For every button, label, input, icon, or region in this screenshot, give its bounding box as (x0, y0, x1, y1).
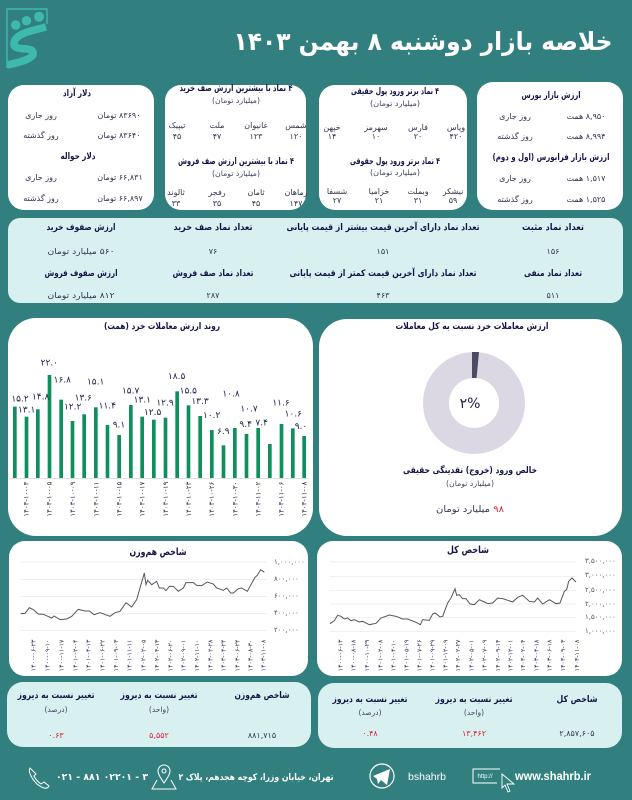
change percent column: تغییر نسبت به دیروز (332, 695, 408, 705)
axis labels: equal weight (274, 558, 305, 634)
real money list: سهرمز (363, 123, 388, 132)
statistics row 2: ۵۱۱ (547, 291, 559, 300)
bar chart: ۶.۹ (217, 427, 230, 437)
line chart: equal weight index: ۱۴۰۲-۰۲-۰۵ (141, 639, 148, 671)
bar chart: ۹.۴ (239, 420, 252, 430)
axis labels: total index: ۳,۵۰۰,۰۰۰ (585, 557, 616, 565)
legal money list: ۳۱ (414, 196, 422, 205)
statistics row 2: تعداد نماد صف فروش (172, 269, 254, 279)
bar chart: ۱۱.۴ (99, 402, 116, 412)
bar chart: ۱۴۰۳-۱۱-۰۸ (301, 481, 309, 517)
donut chart: ۲% (460, 396, 480, 412)
bar chart: ۱۳.۳ (191, 397, 209, 407)
heading: buy queue: ۴ نماد با بیشترین ارزش صف خرید (180, 84, 293, 94)
axis labels: total index: ۲,۰۰۰,۰۰۰ (585, 600, 616, 608)
line chart: total index: ۱۴۰۱-۰۵-۱۹ (403, 639, 410, 671)
change units column (435, 695, 512, 738)
address: تهران، خیابان وزرا، کوچه هجدهم، پلاک ۲ (178, 773, 334, 783)
icon: telegram (370, 764, 394, 788)
line chart: equal weight index: ۱۴۰۳-۰۶-۲۴ (235, 640, 242, 671)
buy queue list: ۴۵ (173, 132, 181, 141)
bar chart: ۲۲.۰ (41, 359, 58, 369)
panel: retail share (319, 319, 622, 536)
buy queue list: ۴۷ (213, 132, 222, 141)
line chart: equal weight index: ۱۴۰۳-۱۱-۰۸ (261, 639, 268, 671)
sell queue list: ۳۵ (213, 199, 221, 208)
legal money list: ۲۷ (333, 196, 342, 205)
statistics row 1: ۷۶ (209, 247, 217, 256)
statistics row 1: تعداد نماد دارای آخرین قیمت بیشتر از قیمت پایانی (286, 221, 480, 233)
sell queue list: ۳۳ (172, 199, 181, 208)
legal money list: ۲۱ (375, 196, 383, 205)
legal money list: ۵۹ (449, 196, 457, 205)
heading: stock market value: ارزش بازار بورس (522, 91, 580, 101)
bar chart: ۱۰.۸ (222, 389, 240, 399)
bar chart: ۱۴۰۳-۱۰-۱۵ (115, 481, 123, 517)
panel: total index summary (318, 683, 622, 748)
bar chart: ۱۴۰۳-۱۱-۰۶ (277, 481, 285, 517)
line chart: equal weight index: ۱۴۰۰-۰۹-۱۰ (45, 640, 52, 671)
axis labels: total index: ۳,۰۰۰,۰۰۰ (585, 571, 616, 579)
change percent column: ۰.۶۳ (48, 731, 64, 740)
legal money list: شسفا (327, 187, 347, 196)
sell queue list: ۱۴۷ (290, 199, 303, 208)
line chart: equal weight index: ۱۴۰۲-۰۹-۰۱ (181, 640, 188, 671)
axis labels: total index: ۱,۵۰۰,۰۰۰ (585, 613, 616, 621)
bar chart: ۷.۴ (255, 419, 268, 429)
footer contact bar (29, 764, 592, 792)
statistics row 2: ۲۸۷ (207, 291, 220, 300)
sell queue list (167, 188, 308, 208)
subheading: (میلیارد تومان) (212, 169, 260, 178)
line chart: equal weight index: ۱۴۰۱-۰۴-۱۳ (86, 639, 93, 671)
bar chart: ۱۰.۷ (240, 404, 258, 414)
change percent column: تغییر نسبت به دیروز (17, 691, 94, 701)
total index value column: شاخص کل (556, 695, 598, 705)
line chart: equal weight index: ۱۴۰۱-۰۶-۲۲ (100, 639, 107, 671)
line chart: total index: ۱۴۰۲-۰۷-۰۹ (482, 639, 489, 671)
heading: equal weight index: شاخص هم‌وزن (130, 547, 187, 558)
change units column (120, 691, 198, 740)
line chart: equal weight index: ۱۴۰۰-۰۶-۲۳ (31, 639, 38, 671)
line chart: total index: ۱۴۰۱-۰۲-۰۸ (377, 639, 384, 671)
real money list: خپهن (323, 123, 341, 132)
panel: market value (477, 82, 623, 210)
real money list: ۱۰ (372, 132, 380, 141)
buy queue list (169, 121, 307, 141)
statistics row 1 (46, 221, 584, 256)
change units column: (واحد) (464, 708, 484, 717)
axis labels: equal weight: ۱,۰۰۰,۰۰۰ (274, 558, 305, 566)
change units column: تغییر نسبت به دیروز (120, 691, 198, 701)
phone number: ۰۲۱ - ۸۸۱ ۰۲۲۰۱ - ۳ (56, 772, 148, 783)
remittance rows: ۶۶,۸۹۷ تومان (97, 194, 143, 203)
buy queue list: ۱۲۰ (290, 132, 302, 141)
bar chart: ۱۳.۶ (75, 393, 92, 403)
legal money list: وبملت (407, 187, 429, 196)
bar chart: ۱۴۰۳-۱۰-۰۹ (69, 481, 77, 517)
statistics row 2: ۸۱۲ میلیارد تومان (48, 291, 115, 300)
axis labels: total index: ۲,۵۰۰,۰۰۰ (585, 586, 616, 594)
website: www.shahrb.ir (514, 771, 592, 783)
panel: money flow (319, 85, 467, 210)
caption: net real liquidity: خالص ورود (خروج) نقدینگی حقیقی (403, 464, 537, 476)
bar chart: ۱۵.۲ (11, 394, 29, 404)
heading: free dollar: دلار آزاد (63, 87, 91, 99)
net value: ۹۸ میلیارد تومان (436, 505, 504, 515)
icon: location pin (152, 765, 176, 789)
logo (7, 9, 47, 68)
bar chart: ۱۴۰۳-۱۰-۳۰ (231, 482, 239, 517)
sell queue list: ۴۵ (252, 199, 260, 208)
bar chart: ۱۲.۲ (64, 403, 82, 413)
equal weight value column (234, 691, 290, 740)
panel: market statistics (8, 218, 623, 303)
change units column: ۵,۵۵۲ (149, 731, 169, 740)
subheading: (میلیارد تومان) (370, 168, 420, 177)
statistics row 1: ۱۵۱ (377, 247, 389, 256)
heading: real money: ۴ نماد برتر ورود پول حقیقی (351, 87, 439, 97)
line chart: equal weight index: ۱۴۰۰-۱۱-۱۷ (59, 639, 66, 671)
axis labels: equal weight: ۲۰۰,۰۰۰ (274, 626, 299, 634)
bar chart: ۹.۱ (113, 420, 125, 430)
axis labels: equal weight: ۸۰۰,۰۰۰ (274, 575, 299, 583)
farabourse rows: روز گذشته (497, 194, 533, 204)
bar chart: ۱۵.۵ (180, 386, 197, 396)
statistics row 1: ارزش صفوف خرید (46, 223, 116, 233)
dollar rows: روز جاری (25, 111, 57, 120)
line chart: equal weight index: ۱۴۰۳-۰۴-۲۴ (221, 640, 228, 671)
line chart: equal weight index (21, 562, 268, 671)
remittance rows (23, 173, 143, 203)
bar chart: ۱۵.۷ (122, 386, 140, 396)
icon: web address cursor: http:// (477, 774, 493, 780)
change units column: ۱۳,۴۶۲ (462, 729, 486, 738)
real money list: ۴۲۰ (450, 132, 462, 141)
panel: total index chart (317, 541, 622, 676)
bar chart: ۱۴۰۳-۱۰-۰۵ (46, 481, 54, 517)
buy queue list: ۱۲۳ (250, 132, 263, 141)
bar chart: ۱۴۰۳-۱۰-۱۱ (92, 482, 100, 517)
line chart: total index: ۱۴۰۰-۰۸-۱۸ (351, 639, 358, 671)
bar chart: ۱۳.۱ (134, 395, 151, 405)
line chart: equal weight index: ۱۴۰۱-۰۲-۰۴ (72, 640, 79, 671)
axis labels: total index: ۱,۰۰۰,۰۰۰ (585, 627, 616, 635)
legal money list (327, 187, 463, 205)
bar chart: ۱۴۰۳-۱۰-۱۷ (139, 481, 147, 517)
axis labels: total index (585, 557, 616, 635)
line chart: equal weight index: ۱۴۰۲-۰۴-۱۳ (154, 639, 161, 671)
subheading: (میلیارد تومان) (212, 96, 260, 105)
statistics row 1: تعداد نماد صف خرید (174, 223, 252, 233)
bar chart: ۱۴۰۳-۱۱-۰۲ (255, 481, 263, 517)
panel: queues (165, 84, 308, 210)
change percent column (332, 695, 408, 738)
bar chart: ۹.۰ (295, 422, 307, 432)
heading: remittance dollar: دلار حواله (60, 152, 96, 162)
statistics row 1: تعداد نماد مثبت (522, 223, 584, 233)
heading: trend: روند ارزش معاملات خرد (همت) (104, 322, 220, 332)
line chart: equal weight index: ۱۴۰۳-۰۲-۲۸ (207, 639, 214, 671)
bar chart: ۱۸.۵ (168, 372, 186, 382)
axis labels: equal weight: ۴۰۰,۰۰۰ (274, 609, 299, 617)
farabourse rows: ۱,۵۱۷ همت (567, 174, 606, 183)
change units column: تغییر نسبت به دیروز (435, 695, 512, 705)
line chart: equal weight index: ۱۴۰۳-۰۸-۳۰ (247, 640, 254, 671)
stock rows: ۸,۹۵۰ همت (567, 112, 605, 121)
bar chart: ۱۳.۱ (18, 405, 35, 415)
sell queue list: رماهان (284, 188, 308, 197)
statistics row 2: تعداد نماد منفی (524, 269, 582, 279)
bar chart: ۱۴۰۳-۱۰-۲۶ (208, 481, 216, 517)
heading: sell queue: ۴ نماد با بیشترین ارزش صف فروش (178, 157, 294, 167)
donut chart (436, 352, 512, 441)
line chart: total index: ۱۴۰۱-۰۹-۲۹ (429, 639, 436, 671)
remittance rows: ۶۶,۸۳۱ تومان (97, 173, 143, 182)
bar chart: ۱۰.۶ (285, 409, 302, 419)
total index value column: ۲,۸۵۷,۶۰۵ (559, 729, 595, 738)
line chart: total index: ۱۴۰۱-۰۷-۲۶ (417, 640, 424, 671)
subheading: (میلیارد تومان) (370, 99, 420, 108)
equal weight value column: شاخص هم‌وزن (234, 691, 290, 701)
icon: web address cursor (473, 769, 514, 792)
bar chart: ۱۲.۵ (144, 408, 162, 418)
line chart: total index: ۱۴۰۲-۰۹-۱۴ (495, 640, 502, 671)
telegram handle: bshahrb (408, 771, 446, 783)
sell queue list: رفجر (207, 188, 226, 197)
legal money list: خزامیا (369, 187, 389, 196)
line chart: equal weight index: ۱۴۰۲-۰۶-۲۰ (167, 640, 174, 671)
equal weight value column: ۸۸۱,۷۱۵ (248, 731, 276, 740)
line chart: equal weight index: ۱۴۰۱-۱۱-۱۱ (127, 640, 134, 671)
panel: dollar (8, 85, 154, 210)
legal money list: نیشکر (442, 187, 463, 196)
line chart: total index: ۱۴۰۰-۰۶-۱۳ (337, 639, 344, 671)
remittance rows: روز جاری (25, 173, 57, 182)
change units column: (واحد) (149, 705, 169, 714)
line chart: total index: ۱۴۰۱-۰۴-۱۰ (391, 640, 398, 671)
caption unit: (میلیارد تومان) (446, 479, 494, 488)
line chart: total index: ۱۴۰۳-۰۴-۱۸ (533, 639, 540, 671)
statistics row 1: ۱۵۶ (547, 247, 559, 256)
line chart: total index: ۱۴۰۳-۰۲-۰۴ (520, 640, 527, 671)
line chart: total index: ۱۴۰۱-۱۲-۰۹ (443, 639, 450, 671)
line chart: total index: ۱۴۰۲-۰۵-۰۱ (468, 640, 475, 671)
change percent column: (درصد) (358, 708, 382, 717)
farabourse rows: روز جاری (499, 174, 531, 183)
icon: phone (29, 768, 49, 788)
remittance rows: روز گذشته (23, 193, 59, 203)
farabourse rows: ۱,۵۲۵ همت (567, 195, 605, 204)
change percent column: (درصد) (44, 705, 68, 714)
statistics row 2 (44, 267, 582, 300)
statistics row 1: ۵۶۰ میلیارد تومان (48, 247, 115, 256)
panel: equal weight summary (7, 682, 311, 747)
buy queue list: تیپیک (169, 121, 185, 130)
heading: total index: شاخص کل (447, 545, 489, 556)
line chart: total index: ۱۴۰۲-۰۲-۲۷ (455, 639, 462, 671)
stock rows: روز گذشته (497, 131, 533, 141)
statistics row 2: تعداد نماد دارای آخرین قیمت کمتر از قیمت پایانی (290, 267, 476, 279)
dollar rows (23, 111, 140, 140)
panel: equal weight index chart (9, 541, 308, 676)
statistics row 2: ارزش صفوف فروش (44, 269, 118, 279)
sell queue list: ثامان (247, 188, 265, 197)
buy queue list: غانیوان (244, 121, 268, 130)
stock rows: ۸,۹۹۴ همت (567, 132, 605, 141)
real money list: فارس (408, 123, 428, 132)
line chart: total index: ۱۴۰۰-۱۰-۲۹ (364, 639, 371, 671)
bar chart: ۱۵.۱ (87, 378, 104, 388)
dollar rows: روز گذشته (23, 130, 59, 140)
sell queue list: ثالوند (167, 188, 185, 197)
bar chart: ۱۶.۸ (54, 375, 71, 385)
change percent column (17, 691, 94, 740)
real money list: ۱۴ (328, 132, 336, 141)
axis labels: equal weight: ۶۰۰,۰۰۰ (274, 592, 299, 600)
real money list (323, 123, 465, 141)
heading: legal money: ۴ نماد برتر ورود پول حقوقی (350, 157, 440, 167)
line chart: total index: ۱۴۰۳-۰۹-۰۳ (560, 639, 567, 671)
statistics row 2: ۴۶۳ (377, 291, 390, 300)
real money list: وپاس (447, 123, 465, 132)
bar chart: ۱۰.۲ (203, 411, 220, 421)
bar chart: ۱۴.۸ (32, 393, 50, 403)
stock rows: روز جاری (499, 112, 531, 121)
bar chart: ۱۲.۹ (156, 398, 174, 408)
total index value column (556, 695, 598, 738)
stock rows (497, 112, 605, 141)
line chart: total index: ۱۴۰۲-۱۲-۰۱ (507, 640, 514, 671)
bar chart: ۱۴۰۳-۱۰-۰۳ (22, 481, 30, 517)
line chart: equal weight index: ۱۴۰۱-۰۹-۰۳ (113, 639, 120, 671)
line chart: equal weight index: ۱۴۰۲-۱۱-۱۰ (194, 640, 201, 671)
panel: retail trade trend (8, 318, 313, 536)
bar chart: ۱۴۰۳-۱۰-۲۳ (185, 481, 193, 517)
dollar rows: ۸۳۶۴۰ تومان (98, 131, 140, 140)
line chart: total index (330, 562, 581, 671)
line chart: total index: ۱۴۰۳-۱۱-۰۸ (574, 639, 581, 671)
title: خلاصه بازار دوشنبه ۸ بهمن ۱۴۰۳ (234, 27, 612, 57)
farabourse rows (497, 174, 606, 204)
dollar rows: ۸۳۶۹۰ تومان (98, 111, 140, 120)
real money list: ۲۰ (414, 132, 422, 141)
buy queue list: ملت (210, 121, 224, 130)
buy queue list: شمس (285, 121, 307, 130)
bar chart: ۱۴۰۳-۱۰-۱۹ (162, 481, 170, 517)
change percent column: ۰.۴۸ (362, 729, 378, 738)
heading: share: ارزش معاملات خرد نسبت به کل معاملات (396, 322, 548, 332)
bar chart: ۱۱.۶ (272, 398, 290, 408)
line chart: total index: ۱۴۰۳-۰۶-۱۸ (547, 639, 554, 671)
bar chart (9, 359, 309, 517)
